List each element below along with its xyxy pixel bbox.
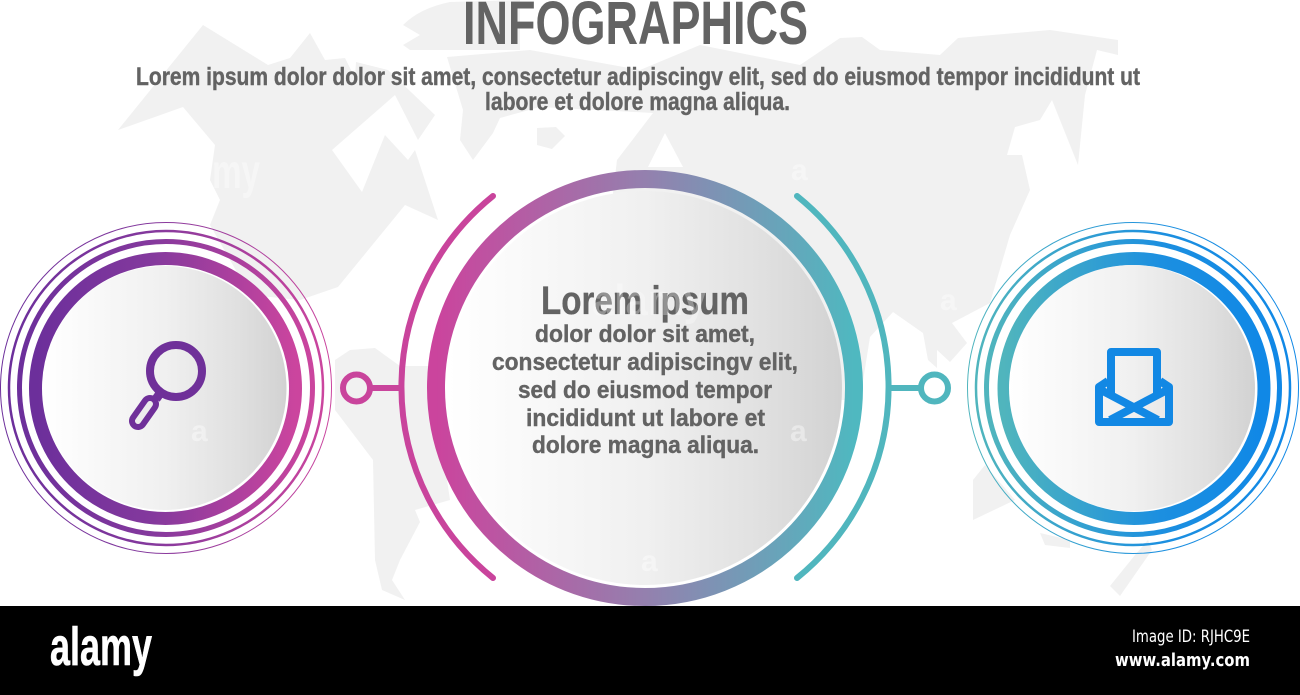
center circle ring: [436, 179, 854, 597]
watermark marks: [191, 146, 957, 578]
image id: Image ID: RJHC9E: [1132, 627, 1250, 647]
watermark marks: a: [791, 154, 808, 187]
subtitle: Lorem ipsum dolor dolor sit amet, consectetur adipiscingv elit, sed do eiusmod tempor incididunt ut: [136, 63, 1141, 91]
icon: magnifying glass: [138, 345, 202, 421]
watermark marks: a: [940, 284, 957, 317]
logo text: alamy: [50, 617, 152, 677]
center body text: dolore magna aliqua.: [532, 432, 759, 459]
center body text: dolor dolor sit amet,: [535, 321, 755, 348]
left arc connector: [343, 196, 493, 578]
center body text: incididunt ut labore et: [526, 405, 765, 432]
watermark marks: my: [212, 146, 260, 199]
right arc connector: [797, 196, 948, 578]
watermark marks: a: [641, 545, 658, 578]
watermark marks: a: [191, 415, 208, 448]
watermark marks: a: [490, 415, 507, 448]
center body text: consectetur adipiscingv elit,: [492, 349, 798, 376]
watermark marks: a: [790, 415, 807, 448]
right circle: mail: [968, 222, 1298, 554]
website: www.alamy.com: [1115, 650, 1250, 671]
subtitle: [136, 63, 1141, 116]
footer bar: [0, 606, 1300, 695]
left circle: search: [0, 222, 332, 554]
background world map: [118, 0, 1152, 600]
watermark marks: alamy: [592, 276, 706, 325]
center body text: [492, 321, 798, 459]
center body text: sed do eiusmod tempor: [518, 377, 772, 404]
center heading: Lorem ipsum: [541, 279, 749, 323]
icon: open envelope: [1099, 352, 1169, 422]
subtitle: labore et dolore magna aliqua.: [485, 88, 790, 116]
